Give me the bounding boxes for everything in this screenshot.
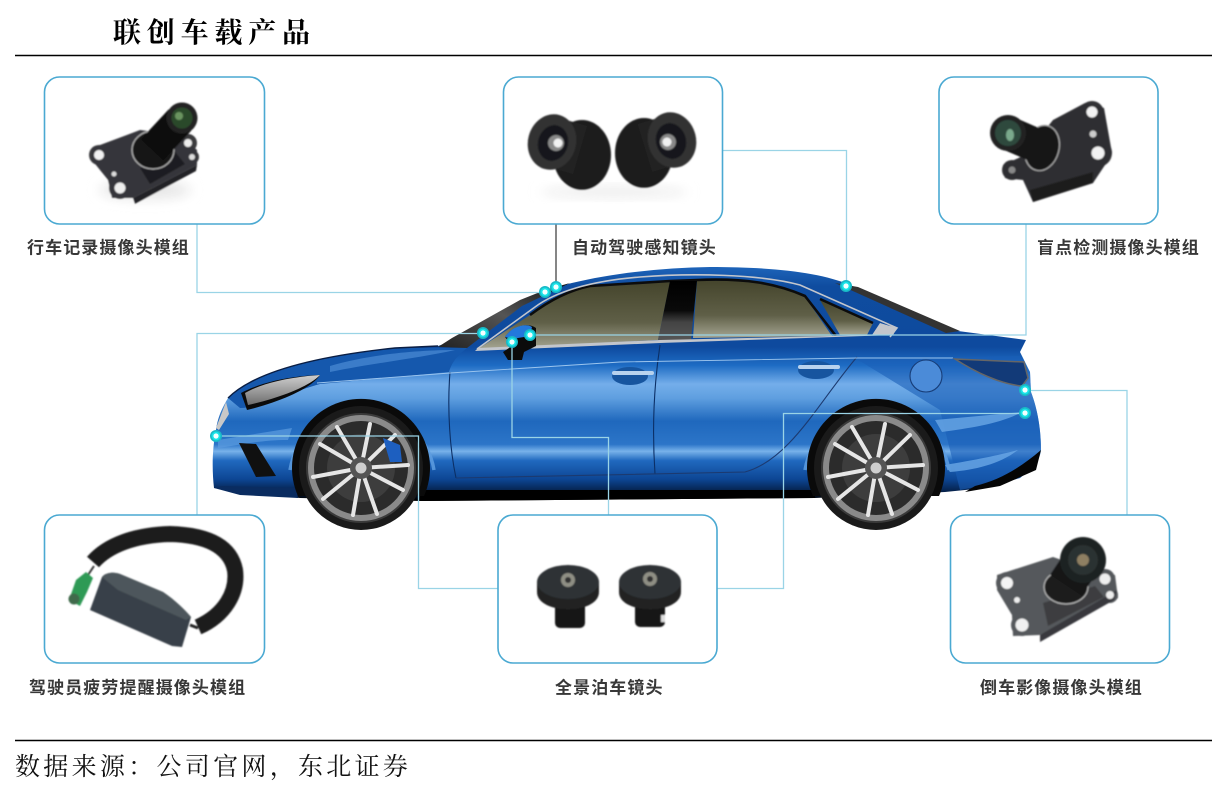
icon: reversing camera xyxy=(996,537,1118,642)
label: reversing camera module: 倒车影像摄像头模组 xyxy=(980,678,1143,698)
front window xyxy=(478,282,670,349)
hood top edge xyxy=(228,346,438,398)
rear wheel xyxy=(814,406,938,530)
brake caliper xyxy=(383,438,402,462)
icon: blind spot camera xyxy=(990,101,1112,202)
b pillar xyxy=(658,281,697,340)
windshield xyxy=(438,283,570,348)
panel: blind spot module xyxy=(939,77,1158,224)
door handles xyxy=(612,361,840,385)
icon: parking lens pair xyxy=(537,565,681,628)
panel: autonomous driving lenses xyxy=(504,77,722,224)
panel: reversing camera module xyxy=(950,515,1170,663)
panel: dashcam module xyxy=(44,77,264,224)
label: surround parking lens: 全景泊车镜头 xyxy=(555,678,664,698)
panel: driver fatigue module xyxy=(44,515,264,663)
icon: fatigue camera with cable xyxy=(68,534,235,647)
front wheel arch xyxy=(290,399,434,496)
label: autonomous driving lens: 自动驾驶感知镜头 xyxy=(572,238,717,258)
rear glass xyxy=(835,283,960,333)
car illustration xyxy=(213,267,1041,530)
front bumper highlight xyxy=(218,428,292,448)
title: 联创车载产品 xyxy=(113,17,316,49)
label: driver fatigue module: 驾驶员疲劳提醒摄像头模组 xyxy=(29,678,246,698)
icon: dashcam camera xyxy=(89,102,199,204)
chrome corner and sill xyxy=(475,323,897,351)
rear diffuser xyxy=(965,450,1041,492)
label: blind spot module: 盲点检测摄像头模组 xyxy=(1037,238,1200,258)
chrome trim xyxy=(477,275,897,349)
quarter window xyxy=(820,300,873,335)
front wheel xyxy=(299,406,423,530)
headlight xyxy=(241,375,320,410)
icon: lens pair xyxy=(522,107,702,196)
panel: surround parking lenses xyxy=(498,515,717,663)
window frames xyxy=(530,280,873,336)
rear wheel arch xyxy=(805,399,949,496)
hood panel xyxy=(228,348,467,408)
connector lines xyxy=(197,150,1127,588)
car body xyxy=(213,267,1041,501)
grille and front details xyxy=(216,402,229,430)
source note: 数据来源：公司官网，东北证券 xyxy=(15,753,411,781)
mirror xyxy=(503,325,536,360)
label: dashcam module: 行车记录摄像头模组 xyxy=(27,238,190,258)
sensor points xyxy=(210,280,1031,442)
underbody shadow xyxy=(420,490,815,501)
hood highlight xyxy=(330,350,455,372)
door and body lines xyxy=(317,345,953,478)
rear quarter panel xyxy=(855,356,1041,490)
rear window xyxy=(693,281,832,338)
tail light xyxy=(955,359,1028,386)
rear highlights xyxy=(935,412,1022,472)
